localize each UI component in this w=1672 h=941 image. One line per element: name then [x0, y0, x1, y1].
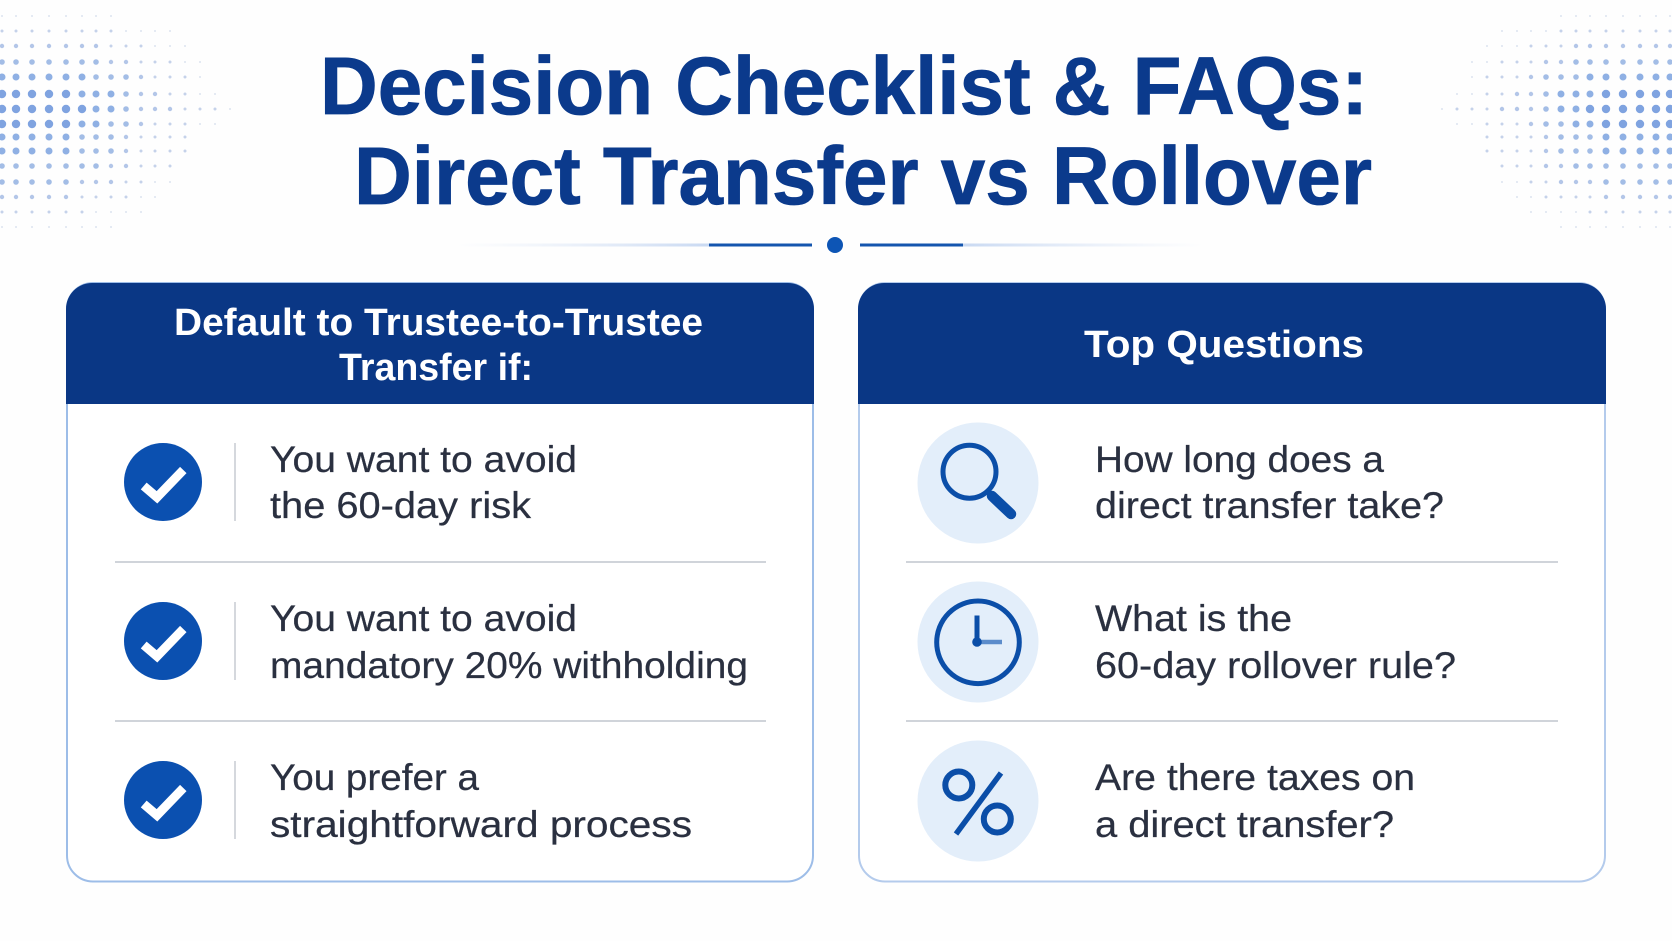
decorative halftone dots: right [1442, 16, 1670, 227]
title: Direct Transfer vs Rollover [354, 131, 1372, 222]
panel header: default to trustee-to-trustee [66, 283, 814, 404]
panel header: default to trustee-to-trustee: Default to Trustee-to-Trustee [174, 302, 703, 344]
title [320, 41, 1372, 222]
checklist row 3: straightforward process [270, 804, 692, 845]
title: Decision Checklist & FAQs: [320, 41, 1368, 132]
question row 3: Are there taxes on [1095, 757, 1415, 798]
checklist row 3: You prefer a [270, 757, 479, 798]
checklist row 2 [124, 598, 748, 686]
panel header: top questions: Top Questions [1084, 324, 1364, 366]
panel: decision checklist [66, 283, 814, 882]
panel: top questions [858, 283, 1606, 882]
icon: magnifying glass [918, 422, 1038, 544]
question row 1 [918, 422, 1444, 544]
icon: percent [918, 740, 1038, 862]
question row 1: direct transfer take? [1095, 485, 1444, 526]
checklist row 2: mandatory 20% withholding [270, 645, 748, 686]
question row 2: What is the [1095, 598, 1292, 639]
question row 2 [918, 582, 1456, 702]
question row 3 [918, 740, 1415, 862]
question row 3: a direct transfer? [1095, 804, 1394, 845]
checklist row 1: You want to avoid [270, 439, 577, 480]
icon: clock [918, 582, 1038, 702]
checklist row 2: You want to avoid [270, 598, 577, 639]
panel header: top questions [858, 283, 1606, 404]
question row 1: How long does a [1095, 439, 1384, 480]
panel header: default to trustee-to-trustee: Transfer if: [339, 347, 533, 389]
checklist row 3 [124, 757, 692, 845]
title divider [455, 237, 1205, 253]
question row 2: 60-day rollover rule? [1095, 645, 1456, 686]
checklist row 1: the 60-day risk [270, 485, 532, 526]
decorative halftone dots: left [2, 16, 230, 227]
checklist row 1 [124, 439, 577, 526]
